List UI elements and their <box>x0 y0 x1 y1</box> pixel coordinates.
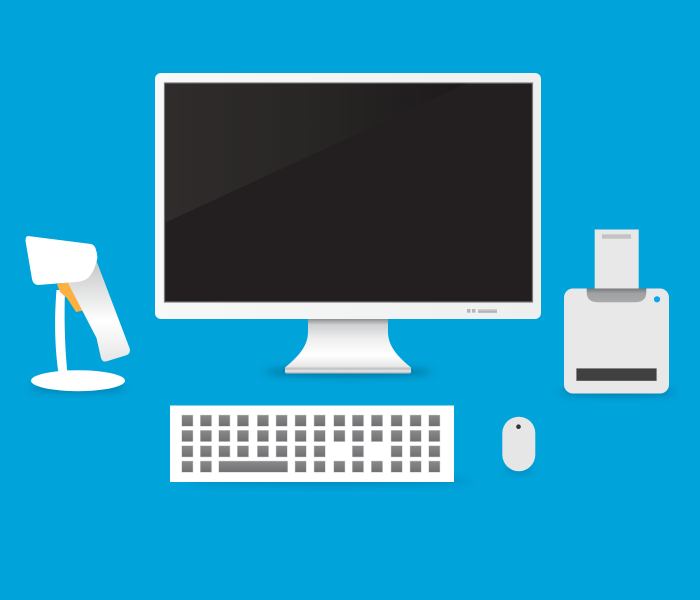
monitor bezel <box>155 73 541 319</box>
scanner base <box>31 370 125 391</box>
receipt text line <box>602 234 631 239</box>
scanner handle <box>68 261 130 362</box>
scanner neck <box>55 290 68 373</box>
mouse body <box>502 417 535 471</box>
printer output bar <box>576 368 656 381</box>
paper slot <box>587 288 646 302</box>
monitor controls <box>467 309 497 313</box>
monitor shadow <box>264 368 432 376</box>
receipt paper <box>595 230 639 290</box>
keyboard <box>170 406 470 484</box>
mouse <box>502 417 535 472</box>
scanner head <box>26 236 97 285</box>
mouse scroll dot <box>516 424 521 429</box>
scanner trigger <box>57 282 83 312</box>
monitor screen <box>164 83 532 302</box>
monitor <box>155 73 541 376</box>
screen glare <box>165 84 466 222</box>
monitor stand <box>285 319 411 368</box>
printer body <box>564 288 669 394</box>
mouse shadow <box>505 468 533 472</box>
keyboard keys <box>182 415 440 472</box>
barcode scanner <box>26 236 130 392</box>
scanner base shadow <box>30 384 126 392</box>
keyboard body <box>170 406 454 482</box>
monitor foot <box>285 368 411 374</box>
receipt printer <box>559 230 675 396</box>
printer shadow <box>559 388 675 396</box>
keyboard shadow <box>190 478 470 484</box>
printer status light <box>654 296 660 302</box>
